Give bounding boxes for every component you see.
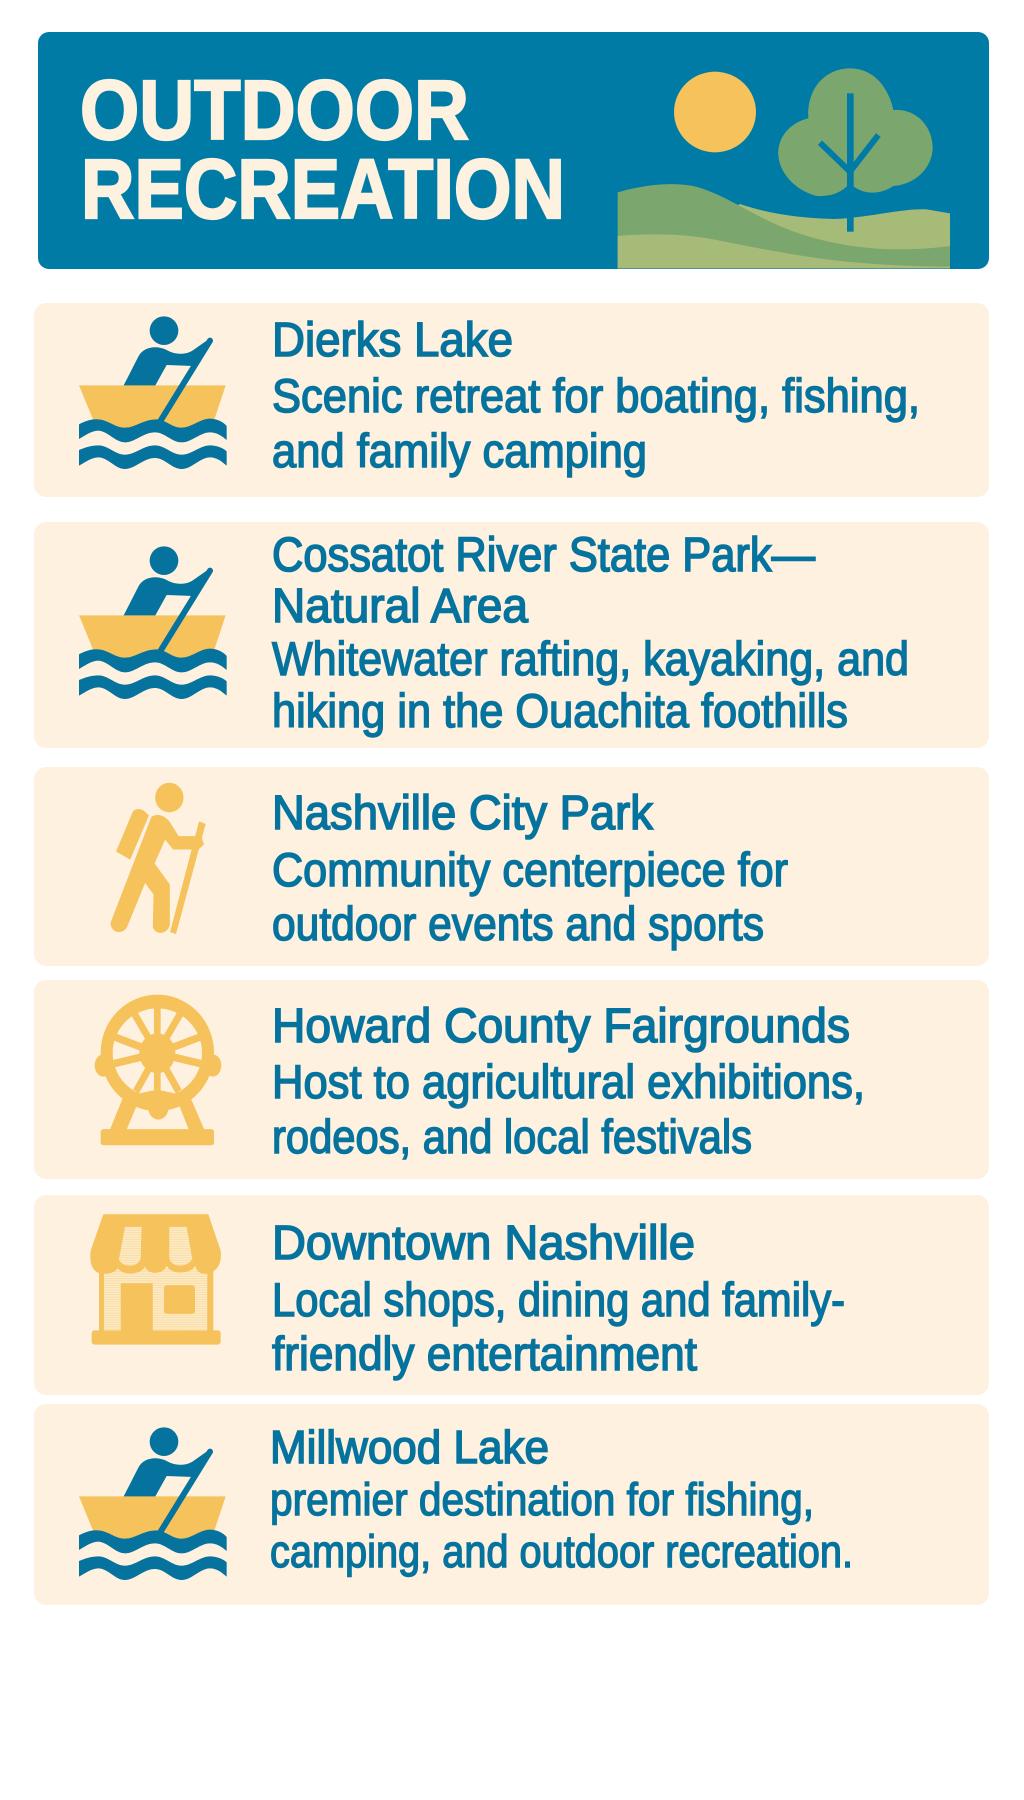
card: Cossatot River State Park (34, 522, 989, 748)
sun (674, 72, 756, 152)
icon: person paddling a boat (79, 316, 227, 469)
card background (34, 1404, 989, 1605)
icon: hiker (111, 783, 205, 933)
card background (34, 767, 989, 966)
header banner (38, 32, 989, 269)
card text (272, 1217, 845, 1380)
card text (272, 1000, 865, 1163)
card text: Natural Area (272, 580, 528, 633)
card text (272, 787, 788, 950)
icon: person paddling a boat (79, 1427, 227, 1580)
card text: hiking in the Ouachita foothills (272, 684, 848, 737)
card text: Howard County Fairgrounds (272, 1000, 850, 1053)
card text: Dierks Lake (272, 314, 513, 367)
card text (272, 314, 920, 477)
card text: friendly entertainment (272, 1327, 697, 1380)
card text: Community centerpiece for (272, 843, 788, 896)
icon: ferris wheel (95, 1001, 221, 1145)
card text (272, 529, 909, 737)
title: OUTDOOR RECREATION: RECREATION (81, 142, 565, 236)
tree (778, 68, 933, 232)
hills (618, 184, 950, 268)
card text: Local shops, dining and family- (272, 1273, 845, 1326)
card text: Scenic retreat for boating, fishing, (272, 369, 920, 422)
title: OUTDOOR RECREATION (80, 63, 565, 236)
card text: Host to agricultural exhibitions, (272, 1055, 865, 1108)
card text: Nashville City Park (272, 787, 654, 840)
card text: camping, and outdoor recreation. (270, 1526, 853, 1577)
card text: outdoor events and sports (272, 897, 764, 950)
icon: person paddling a boat (79, 546, 227, 699)
card: Howard County Fairgrounds (34, 980, 989, 1179)
card: Millwood Lake (34, 1404, 989, 1605)
card text: Millwood Lake (270, 1421, 549, 1473)
card text: Downtown Nashville (272, 1217, 695, 1270)
illustration: sun, tree and hills (618, 68, 950, 268)
card text (270, 1421, 853, 1577)
card text: Cossatot River State Park— (272, 529, 815, 582)
card: Nashville City Park (34, 767, 989, 966)
card background (34, 1195, 989, 1395)
title: OUTDOOR RECREATION: OUTDOOR (80, 63, 469, 157)
card background (34, 980, 989, 1179)
card background (34, 303, 989, 497)
card text: and family camping (272, 424, 647, 477)
card text: premier destination for fishing, (270, 1474, 814, 1525)
banner background (38, 32, 989, 269)
icon: storefront (90, 1214, 221, 1345)
card: Downtown Nashville (34, 1195, 989, 1395)
card background (34, 522, 989, 748)
card text: Whitewater rafting, kayaking, and (272, 632, 909, 685)
card text: rodeos, and local festivals (272, 1110, 752, 1163)
card: Dierks Lake (34, 303, 989, 497)
